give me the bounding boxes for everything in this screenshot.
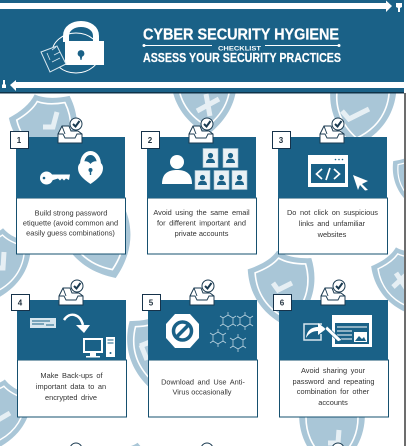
number badge 1: 1 [17,136,22,145]
right page edge [404,93,406,446]
bottom arrow line [10,80,404,91]
panel: card 2: for different important and [157,218,246,228]
icon: padlock with notepad [41,24,104,73]
icon: key bottom [2,80,6,88]
icon: key top [396,3,402,12]
number badge 5: 5 [149,298,154,308]
icon: tray check [59,280,83,305]
panel: card 3 [272,118,388,254]
panel: card 2 [142,118,256,254]
number badge 2: 2 [148,136,153,145]
panel: card 1: etiquette (avoid common and [23,218,118,228]
panel: card 3: websites [317,230,347,239]
card text: Do not click on suspicious [287,208,378,217]
panel: card 5: Virus occasionally [172,388,232,396]
icon: tray check [320,118,344,143]
icon: tray check [190,280,214,305]
checklist label: CHECKLIST [218,46,261,52]
panel: card 6: accounts [318,398,348,407]
icon: tray check [321,280,345,305]
panel: card 4: important data to an [36,382,106,391]
icon: tray check [189,118,213,143]
title: CYBER SECURITY HYGIENE [143,26,339,44]
card text: Build strong password [35,208,107,218]
panel: card 1 [10,118,126,254]
icon: key and heart lock [40,153,103,184]
panel: card 6 [274,280,388,417]
top arrow line [0,0,392,12]
icon: tray check [58,118,82,143]
number badge 6: 6 [280,298,285,308]
panel: card 2: private accounts [175,229,229,238]
icon: share and document [304,315,372,347]
panel: card 5 [142,280,258,417]
panel: card 4: encrypted drive [45,393,97,402]
panel: card 1: easily guess combinations) [26,228,115,238]
card text: Download and Use Anti- [161,378,245,386]
next row tray tops [70,443,344,446]
icon: code window and cursor [308,155,368,190]
icon: virus molecules [210,312,253,352]
subtitle: ASSESS YOUR SECURITY PRACTICES [143,51,341,65]
number badge 3: 3 [279,136,284,145]
card text: Avoid sharing your [301,366,366,375]
header banner [0,0,406,94]
card text: Make Back-ups of [40,371,104,380]
panel: card 6: password and repeating [293,377,374,386]
number badge 4: 4 [18,298,23,308]
divider with dots [142,44,340,47]
panel: card 4 [12,280,126,417]
panel: card 6: combination for other [297,387,370,396]
icon: backup to computer [30,315,115,358]
panel: card 3: links and unfamiliar [299,219,366,228]
card text: Avoid using the same email [153,208,250,217]
icon: stop sign [166,314,199,348]
icon: user accounts [162,148,247,190]
